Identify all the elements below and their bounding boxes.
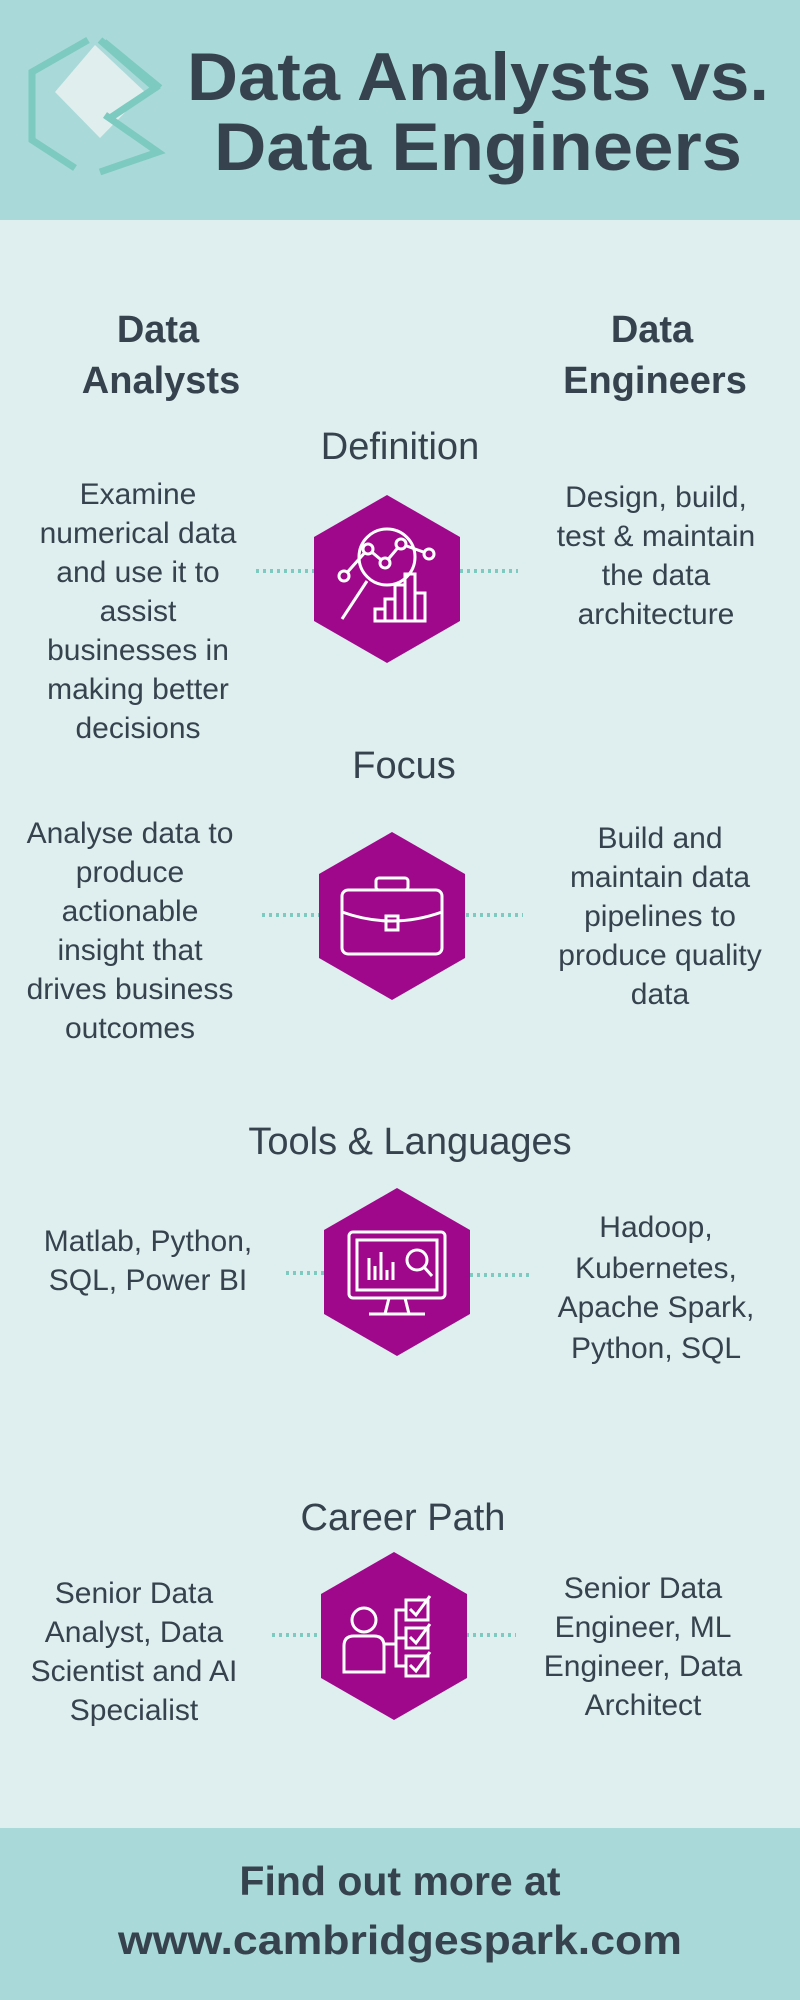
section: focus: produce quality — [558, 939, 762, 972]
section: focus: produce — [76, 856, 184, 889]
icon: person checklist — [321, 1552, 467, 1720]
section: definition: Design, build, — [565, 481, 747, 514]
section: career: Specialist — [70, 1694, 199, 1727]
section: career: Analyst, Data — [45, 1616, 224, 1649]
section: tools: Hadoop, — [599, 1211, 713, 1244]
section: career: Scientist and AI — [31, 1655, 237, 1688]
section: definition: decisions — [75, 712, 201, 745]
icon: analytics — [314, 495, 460, 663]
section: career: Senior Data — [564, 1572, 723, 1605]
section: tools: SQL, Power BI — [49, 1264, 247, 1297]
section: focus: actionable — [62, 895, 198, 928]
footer: www.cambridgespark.com — [117, 1917, 682, 1963]
section: focus: outcomes — [65, 1012, 195, 1045]
section: definition: Definition — [321, 426, 479, 468]
section: definition: and use it to — [56, 556, 220, 589]
section: career: Architect — [585, 1689, 702, 1722]
section: focus: pipelines to — [584, 900, 736, 933]
icon: monitor — [324, 1188, 470, 1356]
column headings: Data — [117, 309, 200, 351]
section: tools — [44, 1121, 754, 1365]
section: focus — [27, 745, 762, 1045]
title — [187, 39, 769, 185]
section: focus: data — [631, 978, 690, 1011]
section: focus: drives business — [27, 973, 233, 1006]
section: tools: Matlab, Python, — [44, 1225, 252, 1258]
section: focus: maintain data — [570, 861, 750, 894]
section: definition: the data — [602, 559, 711, 592]
section: focus: Analyse data to — [27, 817, 233, 850]
section: focus: insight that — [57, 934, 203, 967]
section: focus: Focus — [352, 745, 456, 787]
logo — [32, 40, 160, 172]
section: career — [31, 1497, 743, 1727]
section: tools: Kubernetes, — [575, 1252, 737, 1285]
section: definition: architecture — [578, 598, 734, 631]
footer: Find out more at — [239, 1858, 561, 1904]
column headings — [82, 309, 747, 402]
section: definition — [40, 426, 755, 745]
section: career: Engineer, Data — [544, 1650, 743, 1683]
section: definition: numerical data — [40, 517, 237, 550]
title: Data Engineers — [214, 109, 742, 185]
section: definition: Examine — [80, 478, 196, 511]
column headings: Engineers — [563, 360, 747, 402]
section: career: Senior Data — [55, 1577, 214, 1610]
section: definition: making better — [47, 673, 229, 706]
section: definition: assist — [100, 595, 177, 628]
section: career: Engineer, ML — [555, 1611, 731, 1644]
section: definition: businesses in — [47, 634, 229, 667]
section: tools: Python, SQL — [571, 1332, 741, 1365]
header — [0, 0, 800, 220]
section: definition: test & maintain — [557, 520, 755, 553]
section: focus: Build and — [597, 822, 723, 855]
section: career: Career Path — [301, 1497, 505, 1539]
column headings: Analysts — [82, 360, 240, 402]
icon: briefcase — [319, 832, 465, 1000]
section: tools: Tools & Languages — [248, 1121, 572, 1163]
title: Data Analysts vs. — [187, 39, 769, 115]
footer — [0, 1828, 800, 2000]
section: tools: Apache Spark, — [558, 1291, 754, 1324]
column headings: Data — [611, 309, 694, 351]
